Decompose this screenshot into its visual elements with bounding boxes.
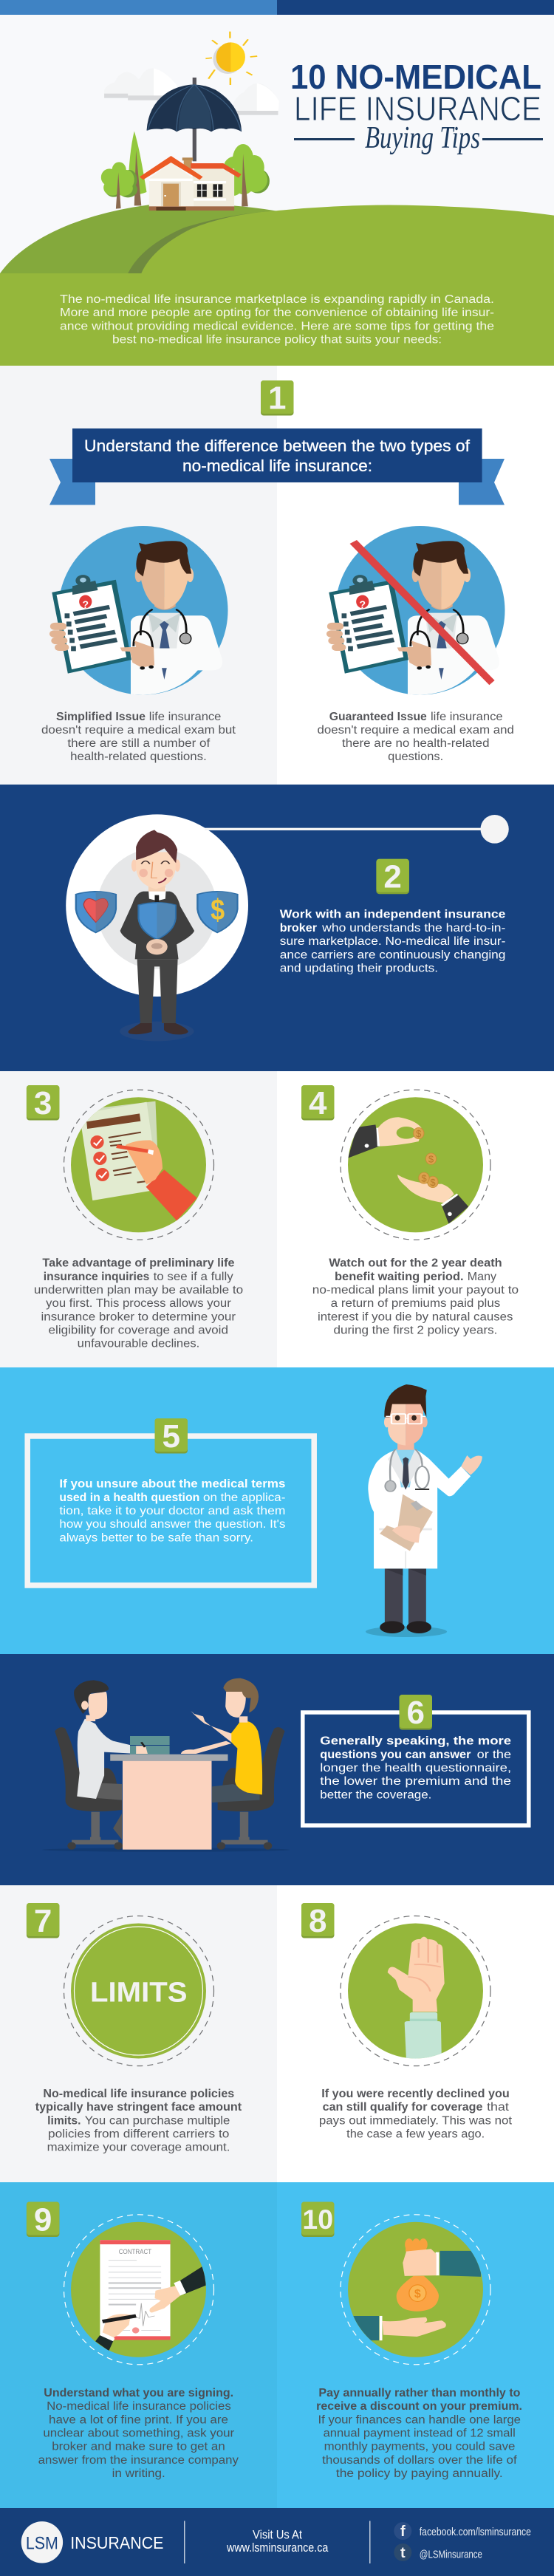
text: tip 7: policies from different carriers to xyxy=(48,2128,229,2141)
icon: coins passing between hands xyxy=(341,1090,490,1240)
text: tip 3: unfavourable declines. xyxy=(78,1338,199,1350)
text: guaranteed issue: there are no health-related xyxy=(342,737,489,750)
text: tip 7 xyxy=(35,2088,242,2154)
icon: path between hills xyxy=(128,211,283,273)
text block: intro paragraph: ance without providing medical evidence. Here are some tips for getting the xyxy=(60,320,494,332)
panel: footer xyxy=(0,2508,554,2576)
badge: number 6 xyxy=(399,1695,432,1731)
panel: tips 9 and 10 xyxy=(0,2182,554,2508)
text block: intro paragraph xyxy=(60,293,494,346)
social: facebook: f xyxy=(400,2524,406,2540)
text: independent broker: sure marketplace. No-medical life insur- xyxy=(280,935,505,948)
text: tip 6 xyxy=(320,1735,512,1801)
text: tip 6: the lower the premium and the xyxy=(320,1775,511,1788)
text: tip 8: the case a few years ago. xyxy=(346,2128,485,2141)
icon: crossed-out doctor with clipboard: ? xyxy=(360,598,366,610)
illustration: hills, house and umbrella xyxy=(0,32,554,273)
text: tip 4: during the first 2 policy years. xyxy=(334,1324,497,1337)
callout frame xyxy=(303,1712,529,1825)
panel: tip 1 xyxy=(0,366,554,785)
logo: LSM Insurance: INSURANCE xyxy=(70,2533,164,2552)
text: tip 6: or the xyxy=(477,1749,511,1761)
text: tip 9: broker and make sure to get an xyxy=(52,2441,225,2453)
icon: limits seal xyxy=(64,1916,214,2066)
text: tip 4: interest if you die by natural causes xyxy=(318,1311,513,1323)
text: tip 4: Watch out for the 2 year death xyxy=(329,1257,502,1270)
icon: insurance broker with shields: $ xyxy=(211,894,225,926)
badge: number 8 xyxy=(301,1903,334,1939)
text: independent broker xyxy=(280,909,506,975)
title: 10 NO-MEDICAL xyxy=(290,58,541,96)
text: tip 9 xyxy=(38,2387,239,2480)
badge: number 9: 9 xyxy=(34,2201,52,2238)
text: simplified issue: health-related questions. xyxy=(70,751,207,763)
text: tip 10: receive a discount on your premium. xyxy=(316,2400,522,2413)
text: tip 3: to see if a fully xyxy=(154,1271,233,1283)
title: Buying Tips xyxy=(365,121,480,155)
banner: heading: Understand the difference between the two types of xyxy=(84,437,471,455)
text: website: www.lsminsurance.ca xyxy=(226,2541,329,2555)
badge: number 9 xyxy=(27,2201,59,2238)
text: simplified issue: there are still a number of xyxy=(67,737,211,750)
text: tip 5: always better to be safe than sorry. xyxy=(59,1531,253,1544)
icon: coins passing between hands: $ xyxy=(428,1154,434,1164)
icon: money bag handed over xyxy=(341,2215,490,2365)
icon: doctor consultation at desk xyxy=(42,1678,290,1852)
icon: coins passing between hands: $ xyxy=(421,1173,427,1183)
text: tip 3: insurance inquiries xyxy=(44,1271,149,1283)
text: independent broker: Work with an independent insurance xyxy=(280,909,506,921)
badge: number 3: 3 xyxy=(34,1085,52,1121)
top colour bar xyxy=(0,0,554,15)
text: simplified issue xyxy=(41,711,236,763)
icon: house xyxy=(140,156,242,211)
badge: number 5: 5 xyxy=(162,1418,180,1455)
text: tip 8 xyxy=(319,2088,513,2141)
badge: number 3 xyxy=(27,1085,59,1121)
text: tip 10: annual payment instead of 12 small xyxy=(324,2428,516,2439)
text: guaranteed issue: life insurance xyxy=(431,711,503,723)
text block: intro paragraph: The no-medical life insurance marketplace is expanding rapidly in Canada. xyxy=(60,293,494,306)
text: independent broker: ance carriers are continuously changing xyxy=(280,949,505,961)
icon: doctor standing xyxy=(366,1384,482,1637)
text: tip 8: can still qualify for coverage xyxy=(323,2101,483,2114)
text: tip 4 xyxy=(312,1257,519,1337)
text: website xyxy=(226,2527,329,2555)
text: tip 8: If you were recently declined you xyxy=(321,2088,510,2100)
text: independent broker: and updating their products. xyxy=(280,962,438,975)
text: tip 5: how you should answer the question. It's xyxy=(59,1518,286,1531)
text: tip 10 xyxy=(316,2387,522,2480)
text: simplified issue: life insurance xyxy=(149,711,221,723)
badge: number 1 xyxy=(261,380,294,417)
text: tip 10: Pay annually rather than monthly to xyxy=(318,2387,520,2399)
social: facebook: facebook.com/lsminsurance xyxy=(420,2527,531,2538)
text: tip 9: unclear about something, ask your xyxy=(43,2428,234,2439)
text: tip 9: No-medical life insurance policies xyxy=(47,2400,231,2413)
icon: sun xyxy=(205,32,257,85)
text: website: Visit Us At xyxy=(253,2527,302,2541)
icon: raised hand xyxy=(341,1916,490,2066)
panel: tips 3 and 4 xyxy=(0,1071,554,1367)
badge: number 2: 2 xyxy=(383,859,402,895)
icon: clouds xyxy=(104,68,279,115)
icon: umbrella xyxy=(146,78,242,161)
text: simplified issue: Simplified Issue xyxy=(56,711,146,723)
text: tip 3: underwritten plan may be available to xyxy=(34,1284,243,1296)
social: twitter xyxy=(394,2543,482,2561)
callout frame xyxy=(27,1436,314,1585)
icon: insurance broker with shields xyxy=(66,814,509,1041)
text: tip 4: Many xyxy=(468,1271,496,1283)
icon: money bag handed over: $ xyxy=(414,2288,421,2300)
text: tip 5: on the applica- xyxy=(203,1492,285,1504)
panel: intro xyxy=(0,273,554,366)
text: tip 3 xyxy=(34,1257,243,1350)
text: tip 9: in writing. xyxy=(112,2467,165,2480)
panel: tips 7 and 8 xyxy=(0,1885,554,2182)
logo: LSM Insurance: LSM xyxy=(26,2534,58,2554)
text: tip 6: Generally speaking, the more xyxy=(320,1735,512,1748)
text: tip 5: used in a health question xyxy=(59,1492,199,1504)
text: tip 5: tion, take it to your doctor and ask them xyxy=(59,1505,285,1517)
text: tip 10: If your finances can handle one large xyxy=(318,2413,521,2426)
text: tip 3: Take advantage of preliminary life xyxy=(42,1257,235,1270)
text block: intro paragraph: best no-medical life insurance policy that suits your needs: xyxy=(112,334,442,346)
text: tip 3: eligibility for coverage and avoid xyxy=(49,1324,228,1337)
panel: tip 5 xyxy=(0,1367,554,1654)
text: guaranteed issue: doesn't require a medical exam and xyxy=(318,724,514,737)
social: twitter: t xyxy=(400,2545,406,2561)
icon: contract signing xyxy=(64,2215,214,2365)
text: tip 5 xyxy=(59,1478,286,1544)
text block: intro paragraph: More and more people are opting for the convenience of obtaining life insur- xyxy=(60,307,494,319)
banner: heading xyxy=(49,428,505,505)
text: tip 3: you first. This process allows your xyxy=(46,1297,231,1310)
text: tip 9: Understand what you are signing. xyxy=(44,2387,233,2399)
text: guaranteed issue xyxy=(318,711,514,763)
panel: tip 2 xyxy=(0,785,554,1071)
text: tip 7: typically have stringent face amount xyxy=(35,2101,242,2114)
title xyxy=(290,58,543,155)
icon: right hill xyxy=(141,205,554,273)
panel: tip 6 xyxy=(0,1654,554,1885)
text: tip 7: maximize your coverage amount. xyxy=(47,2142,230,2154)
icon: limits seal: LIMITS xyxy=(90,1977,188,2008)
icon: contract signing: CONTRACT xyxy=(119,2248,152,2255)
panel: header xyxy=(0,15,554,273)
social: facebook xyxy=(394,2522,531,2540)
icon: trees xyxy=(101,131,270,209)
icon: doctor with clipboard: ? xyxy=(83,598,89,610)
badge: number 5 xyxy=(155,1418,188,1455)
text: independent broker: who understands the hard-to-in- xyxy=(321,922,505,935)
text: tip 9: have a lot of fine print. If you are xyxy=(49,2413,228,2426)
badge: number 4 xyxy=(301,1085,334,1121)
icon: coins passing between hands: $ xyxy=(430,1177,436,1188)
banner: heading: no-medical life insurance: xyxy=(182,457,372,475)
social: twitter: @LSMinsurance xyxy=(420,2549,482,2561)
badge: number 4: 4 xyxy=(309,1085,327,1121)
icon: crossed-out doctor with clipboard xyxy=(326,526,505,695)
icon: coins passing between hands: $ xyxy=(416,1128,422,1139)
badge: number 8: 8 xyxy=(309,1903,326,1939)
text: independent broker: broker xyxy=(280,922,317,935)
text: tip 6: longer the health questionnaire, xyxy=(320,1762,511,1774)
text: tip 4: no-medical plans limit your payout to xyxy=(312,1284,519,1296)
badge: number 7 xyxy=(27,1903,59,1939)
text: tip 3: insurance broker to determine your xyxy=(41,1311,236,1323)
logo: LSM Insurance xyxy=(21,2521,164,2563)
text: tip 10: the policy by paying annually. xyxy=(336,2467,503,2480)
text: tip 7: No-medical life insurance policies xyxy=(43,2088,234,2100)
badge: number 2 xyxy=(376,859,409,895)
badge: number 10: 10 xyxy=(302,2204,333,2235)
text: tip 7: limits. xyxy=(47,2114,81,2127)
text: tip 6: better the coverage. xyxy=(320,1788,431,1801)
icon: checklist being ticked xyxy=(64,1090,214,1240)
badge: number 1: 1 xyxy=(268,380,286,417)
text: simplified issue: doesn't require a medical exam but xyxy=(41,724,236,737)
text: tip 10: thousands of dollars over the life of xyxy=(322,2454,517,2467)
text: tip 8: pays out immediately. This was not xyxy=(319,2114,513,2127)
icon: left hill xyxy=(0,204,276,273)
text: guaranteed issue: Guaranteed Issue xyxy=(329,711,427,723)
text: tip 9: answer from the insurance company xyxy=(38,2454,239,2467)
text: tip 8: that xyxy=(487,2101,510,2114)
text: tip 6: questions you can answer xyxy=(320,1749,471,1761)
text: tip 4: benefit waiting period. xyxy=(335,1271,464,1283)
text: tip 4: a return of premiums paid plus xyxy=(331,1297,501,1310)
badge: number 7: 7 xyxy=(34,1903,52,1939)
text: guaranteed issue: questions. xyxy=(388,751,443,763)
badge: number 6: 6 xyxy=(406,1695,425,1731)
text: tip 5: If you unsure about the medical terms xyxy=(59,1478,285,1491)
icon: doctor with clipboard xyxy=(49,526,228,695)
text: tip 7: You can purchase multiple xyxy=(85,2114,230,2127)
text: tip 10: monthly payments, you could save xyxy=(324,2441,515,2453)
